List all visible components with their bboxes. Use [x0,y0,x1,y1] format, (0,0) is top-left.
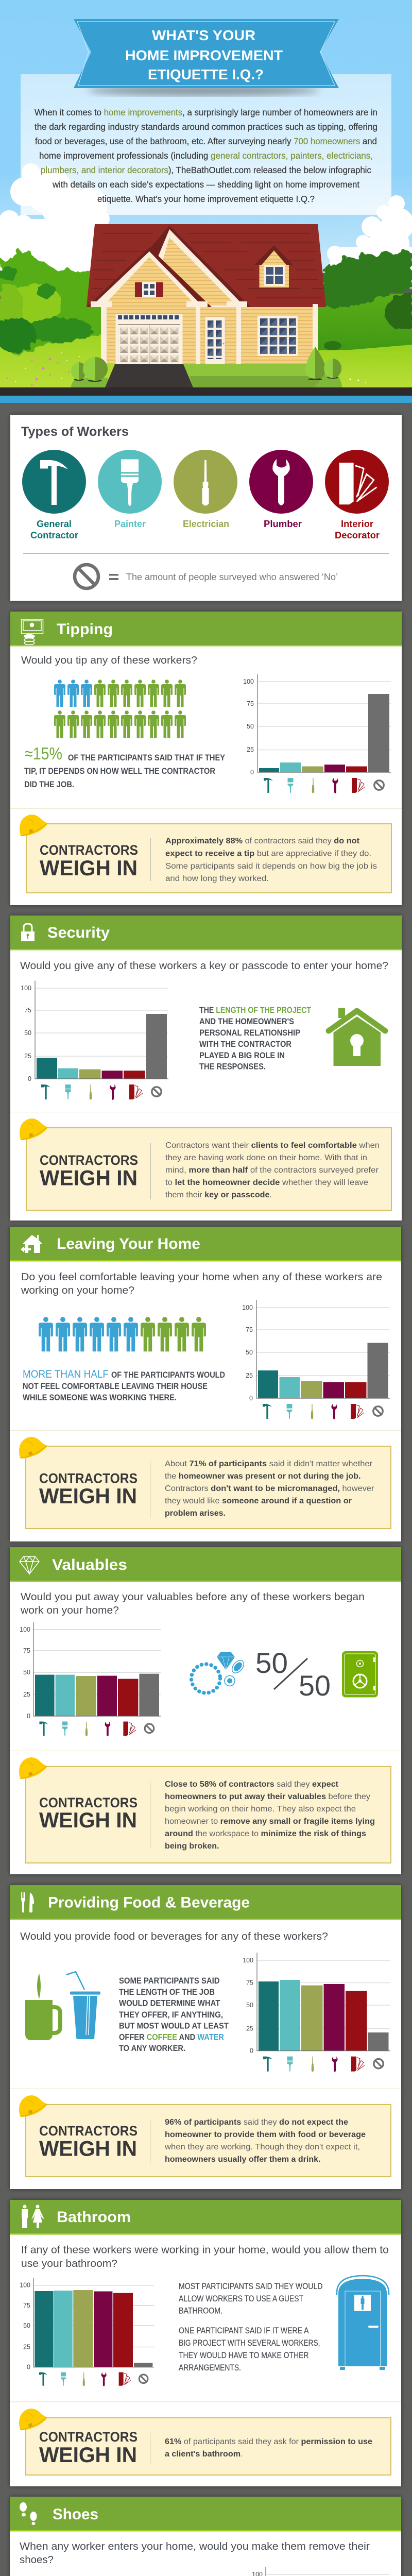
question: Do you feel comfortable leaving your home when any of these workers are [21,1271,382,1283]
stat text: THE LENGTH OF THE PROJECT [199,1005,312,1015]
icon: portable toilet [337,2276,389,2370]
intro text: etiquette. What's your home improvement etiquette I.Q.? [97,194,315,204]
section header: Tipping [57,621,113,638]
title text: WHAT'S YOUR [152,27,255,43]
question [21,1271,382,1296]
title text: ETIQUETTE I.Q.? [148,66,264,82]
callout: contractors weigh in: homeowner to provide them with food or beverage [165,2130,366,2139]
callout: contractors weigh in: WEIGH IN [39,2443,137,2467]
callout: contractors weigh in [19,2095,391,2177]
callout: contractors weigh in: to let the homeowner decide whether they will leave [165,1178,368,1187]
section header [10,916,402,950]
heading: Types of Workers [21,425,129,439]
intro text: When it comes to home improvements, a surprisingly large number of homeowners are in [35,107,377,117]
worker labels: Decorator [335,530,380,540]
stat text: TIP, IT DEPENDS ON HOW WELL THE CONTRACTOR [24,766,215,776]
stat text: BUT MOST WOULD AT LEAST [119,2021,229,2031]
bar chart: 75 [247,700,254,707]
intro backing panel [21,74,391,215]
panel: valuables [10,1547,401,1874]
legend [75,565,338,588]
question: Would you tip any of these workers? [21,654,197,666]
bar chart: 50 [23,2322,30,2329]
intro text: plumbers, and interior decorators), TheBathOutlet.com released the below infographic [41,165,371,175]
callout: contractors weigh in: CONTRACTORS [39,2429,138,2445]
callout: contractors weigh in: Contractors don't want to be micromanaged, however [165,1484,374,1493]
callout: contractors weigh in: being broken. [165,1842,219,1851]
bar chart: 100 [21,985,31,992]
callout: contractors weigh in: CONTRACTORS [40,1153,138,1168]
bar chart: 100 [242,1304,253,1311]
question: If any of these workers were working in your home, would you allow them to [21,2244,389,2256]
panel: shoes [10,2497,401,2576]
front hedge and driveway [71,364,342,387]
icon: footprints [20,2502,37,2525]
stat text [23,1368,225,1402]
stat text [199,1005,312,1072]
callout: contractors weigh in: when they are working. Though they don't expect it, [164,2143,360,2151]
title text [125,27,283,82]
panel: types of workers [10,415,402,601]
panel: providing food and beverage [10,1885,401,2189]
section header [10,1227,401,1261]
section header [10,612,402,646]
bar chart: 0 [250,769,254,776]
icon: painter [98,450,162,514]
icon: plumber [249,450,313,514]
bar chart: 50 [246,1349,253,1356]
stat text: PERSONAL RELATIONSHIP [199,1028,300,1038]
bar chart: 50 [246,2002,253,2009]
bar chart: 25 [246,2025,253,2032]
section header: Security [47,924,110,941]
stat text: WHILE SOMEONE WAS WORKING THERE. [23,1393,177,1402]
question [21,2244,389,2269]
bar chart: 100 [243,1957,253,1964]
bar chart [243,674,391,793]
bar chart [252,2567,390,2576]
callout: contractors weigh in: problem arises. [165,1509,226,1518]
question: working on your home? [21,1284,134,1296]
stat text: DID THE JOB. [24,779,74,789]
section header: Providing Food & Beverage [48,1894,250,1911]
callout: contractors weigh in: around the workspace to minimize the risk of things [165,1829,366,1838]
callout: contractors weigh in [20,1118,391,1210]
bar chart: 100 [20,2282,30,2289]
intro text: food or beverages, use of the bathroom, etc. After surveying nearly 700 homeowners and [35,136,377,146]
question: work on your home? [20,1604,119,1616]
bar chart [21,981,168,1100]
stat text: MORE THAN HALF [23,1368,109,1380]
icon: house with exit arrow [21,1235,42,1253]
house: roof [87,224,326,307]
house: front door [205,317,225,364]
callout: contractors weigh in [19,1437,391,1529]
title banner [74,19,339,96]
question [20,1591,365,1616]
bar chart: 25 [246,1372,253,1379]
bar chart: 75 [23,2302,30,2309]
house: dormer [254,245,293,287]
icon: cup with straw [66,1972,100,2039]
panel: security [10,916,402,1221]
bar chart [20,2278,154,2386]
callout: contractors weigh in [19,2409,391,2475]
icon: jewels [192,1652,246,1693]
stat text: WOULD DETERMINE WHAT [119,1998,220,2008]
callout: contractors weigh in: About 71% of participants said it didn't matter whether [165,1460,373,1468]
stat text: TO ANY WORKER. [119,2043,185,2053]
stat text: MOST PARTICIPANTS SAID THEY WOULD [179,2281,322,2291]
stat text: ARRANGEMENTS. [179,2363,241,2372]
worker labels: Contractor [30,530,78,540]
section header: Shoes [53,2506,98,2523]
bar chart: 0 [27,2364,30,2371]
bar chart [20,1622,161,1736]
section header [10,2497,401,2532]
bar chart: 75 [24,1007,31,1014]
bar chart: 0 [249,1395,253,1402]
intro text: home improvement professionals (including general contractors, painters, electricians, [39,150,373,161]
callout: contractors weigh in: Approximately 88% of contractors said they do not [165,837,360,845]
pictogram: 20 people [54,680,186,738]
callout: contractors weigh in [20,815,391,893]
road and blue band [0,387,412,403]
callout: contractors weigh in: CONTRACTORS [39,1795,138,1810]
stat text [179,2281,322,2372]
callout: contractors weigh in: WEIGH IN [40,856,138,880]
stat text [119,1976,229,2053]
callout: contractors weigh in: 96% of participants said they do not expect the [165,2118,348,2127]
question: When any worker enters your home, would you make them remove their [20,2540,370,2552]
worker labels: Interior [341,519,373,529]
stat text [24,744,226,789]
panel: tipping [10,612,402,905]
callout: contractors weigh in: the homeowner was present or not during the job. [165,1472,360,1481]
bar chart: 75 [246,1979,253,1987]
stat text: SOME PARTICIPANTS SAID [119,1976,219,1986]
title text: HOME IMPROVEMENT [125,47,283,63]
stat text: ONE PARTICIPANT SAID IF IT WERE A [179,2326,309,2335]
icon: money [22,619,43,645]
stat text: OFFER COFFEE AND WATER [119,2032,224,2042]
bar chart: 100 [243,678,254,685]
callout: contractors weigh in: Some participants said it depends on how big the job is [165,862,377,871]
bar chart: 50 [24,1029,31,1037]
worker labels: Painter [114,519,146,529]
bar chart: 75 [23,1647,30,1654]
worker labels [30,519,380,540]
shrubs [71,347,341,382]
icon: diamond [20,1556,39,1574]
stat text: THEY OFFER, IF ANYTHING, [119,2010,223,2020]
icon: house with keyhole [329,1008,385,1066]
stat text: THE RESPONSES. [199,1061,266,1072]
stat text: THE LENGTH OF THE JOB [119,1987,215,1997]
stat text: BATHROOM. [179,2306,222,2316]
section header: Leaving Your Home [57,1235,200,1252]
worker labels: General [37,519,72,529]
callout: contractors weigh in: homeowners to put away their valuables before they [165,1792,370,1801]
icon: electrician [174,450,237,514]
callout: contractors weigh in: 61% of participants said they ask for permission to use [165,2437,372,2446]
worker labels: Electrician [183,519,229,529]
stat text: OF THE PARTICIPANTS WOULD [111,1370,225,1380]
callout: contractors weigh in: a client's bathroom. [165,2450,243,2459]
icon: interior decorator [325,450,389,514]
stat text: ALLOW WORKERS TO USE A GUEST [179,2294,303,2303]
callout: contractors weigh in: begin working on their home. They also expect the [165,1805,356,1814]
icon: general contractor [22,450,86,514]
clouds [0,163,412,291]
house: right window [258,316,298,356]
house: shuttered window [135,282,163,297]
stat text: AND THE HOMEOWNER'S [199,1016,294,1026]
right lawn and trees [309,249,412,353]
stat text: BIG PROJECT WITH SEVERAL WORKERS, [179,2338,320,2348]
icon: fork and knife [21,1892,34,1912]
callout: contractors weigh in: WEIGH IN [39,1484,137,1508]
icon: man and woman [22,2205,44,2228]
50/50 stat: 50 [255,1647,288,1679]
callout: contractors weigh in: CONTRACTORS [40,842,138,858]
intro text: the dark regarding industry standards around common practices such as tipping, offering [35,122,377,132]
bar chart: 0 [250,2047,253,2055]
callout: contractors weigh in: they would like someone around if a question or [165,1497,352,1505]
stat text: ≈15% [25,744,62,763]
question: Would you provide food or beverages for any of these workers? [20,1930,328,1942]
bar chart: 75 [246,1326,253,1333]
callout: contractors weigh in: homeowner to remove any small or fragile items lying [165,1817,375,1826]
left tree [0,247,103,355]
panel: bathroom [10,2200,401,2486]
question: use your bathroom? [21,2258,117,2269]
stat text: WITH THE CONTRACTOR [199,1039,291,1049]
section header [10,1547,401,1582]
callout: contractors weigh in: they are having work done on their home. With that in [165,1154,367,1162]
icon: padlock [21,924,35,941]
callout: contractors weigh in: Contractors want their clients to feel comfortable when [165,1141,380,1150]
callout: contractors weigh in: CONTRACTORS [39,2123,138,2139]
stat text: PLAYED A BIG ROLE IN [199,1050,285,1060]
panel: leaving your home [10,1227,401,1541]
50/50 stat: 50 [299,1669,331,1702]
section header: Valuables [52,1556,127,1573]
icon: coffee mug [25,1973,60,2040]
callout: contractors weigh in: and how long they worked. [165,874,269,883]
hero: sky, clouds, house and lawn [0,0,412,403]
question: Would you give any of these workers a key or passcode to enter your home? [20,960,388,972]
callout: contractors weigh in: mind, more than half of the contractors surveyed prefer [165,1166,379,1175]
bar chart: 25 [23,2343,30,2350]
bar chart: 25 [23,1691,30,1698]
50/50 stat [255,1647,331,1702]
stat text: NOT FEEL COMFORTABLE LEAVING THEIR HOUSE [23,1381,208,1391]
question: Would you put away your valuables before any of these workers began [21,1591,365,1603]
callout: contractors weigh in: WEIGH IN [39,1808,137,1832]
flowers [6,354,70,385]
bar chart: 100 [20,1626,30,1633]
bar chart: 25 [247,746,254,753]
stat text: OF THE PARTICIPANTS SAID THAT IF THEY [68,753,226,762]
callout: contractors weigh in: Close to 58% of contractors said they expect [165,1780,339,1789]
callout: contractors weigh in: WEIGH IN [40,1165,138,1190]
question [20,2540,370,2566]
bar chart: 0 [28,1075,31,1082]
section header [10,1885,401,1920]
callout: contractors weigh in: homeowners usually offer them a drink. [165,2155,320,2164]
stat text: THEY WOULD HAVE TO MAKE OTHER [179,2350,309,2360]
callout: contractors weigh in [19,1757,391,1863]
house: garage door [115,314,182,364]
callout: contractors weigh in: WEIGH IN [39,2137,137,2161]
icon: safe [342,1651,378,1697]
callout: contractors weigh in: expect to receive a tip but are appreciative if they do. [165,849,371,858]
section header [10,2200,401,2235]
pictogram: 10 people [39,1317,206,1351]
intro text: with details on each side's expectations — shedding light on home improvement [52,179,359,190]
intro text [35,107,377,204]
worker labels: Plumber [264,519,302,529]
callout: contractors weigh in: CONTRACTORS [39,1471,138,1486]
section header: Bathroom [57,2209,131,2226]
bar chart [243,1953,390,2072]
question: shoes? [20,2554,54,2566]
callout: contractors weigh in: them their key or passcode. [165,1191,272,1199]
left lawn [0,319,124,387]
legend: The amount of people surveyed who answered ‘No’ [126,572,338,582]
bar chart [242,1300,390,1419]
house: facade [87,226,318,364]
bar chart: 0 [27,1713,30,1720]
bar chart: 50 [247,723,254,730]
bar chart: 25 [24,1053,31,1060]
bar chart: 50 [23,1669,30,1676]
